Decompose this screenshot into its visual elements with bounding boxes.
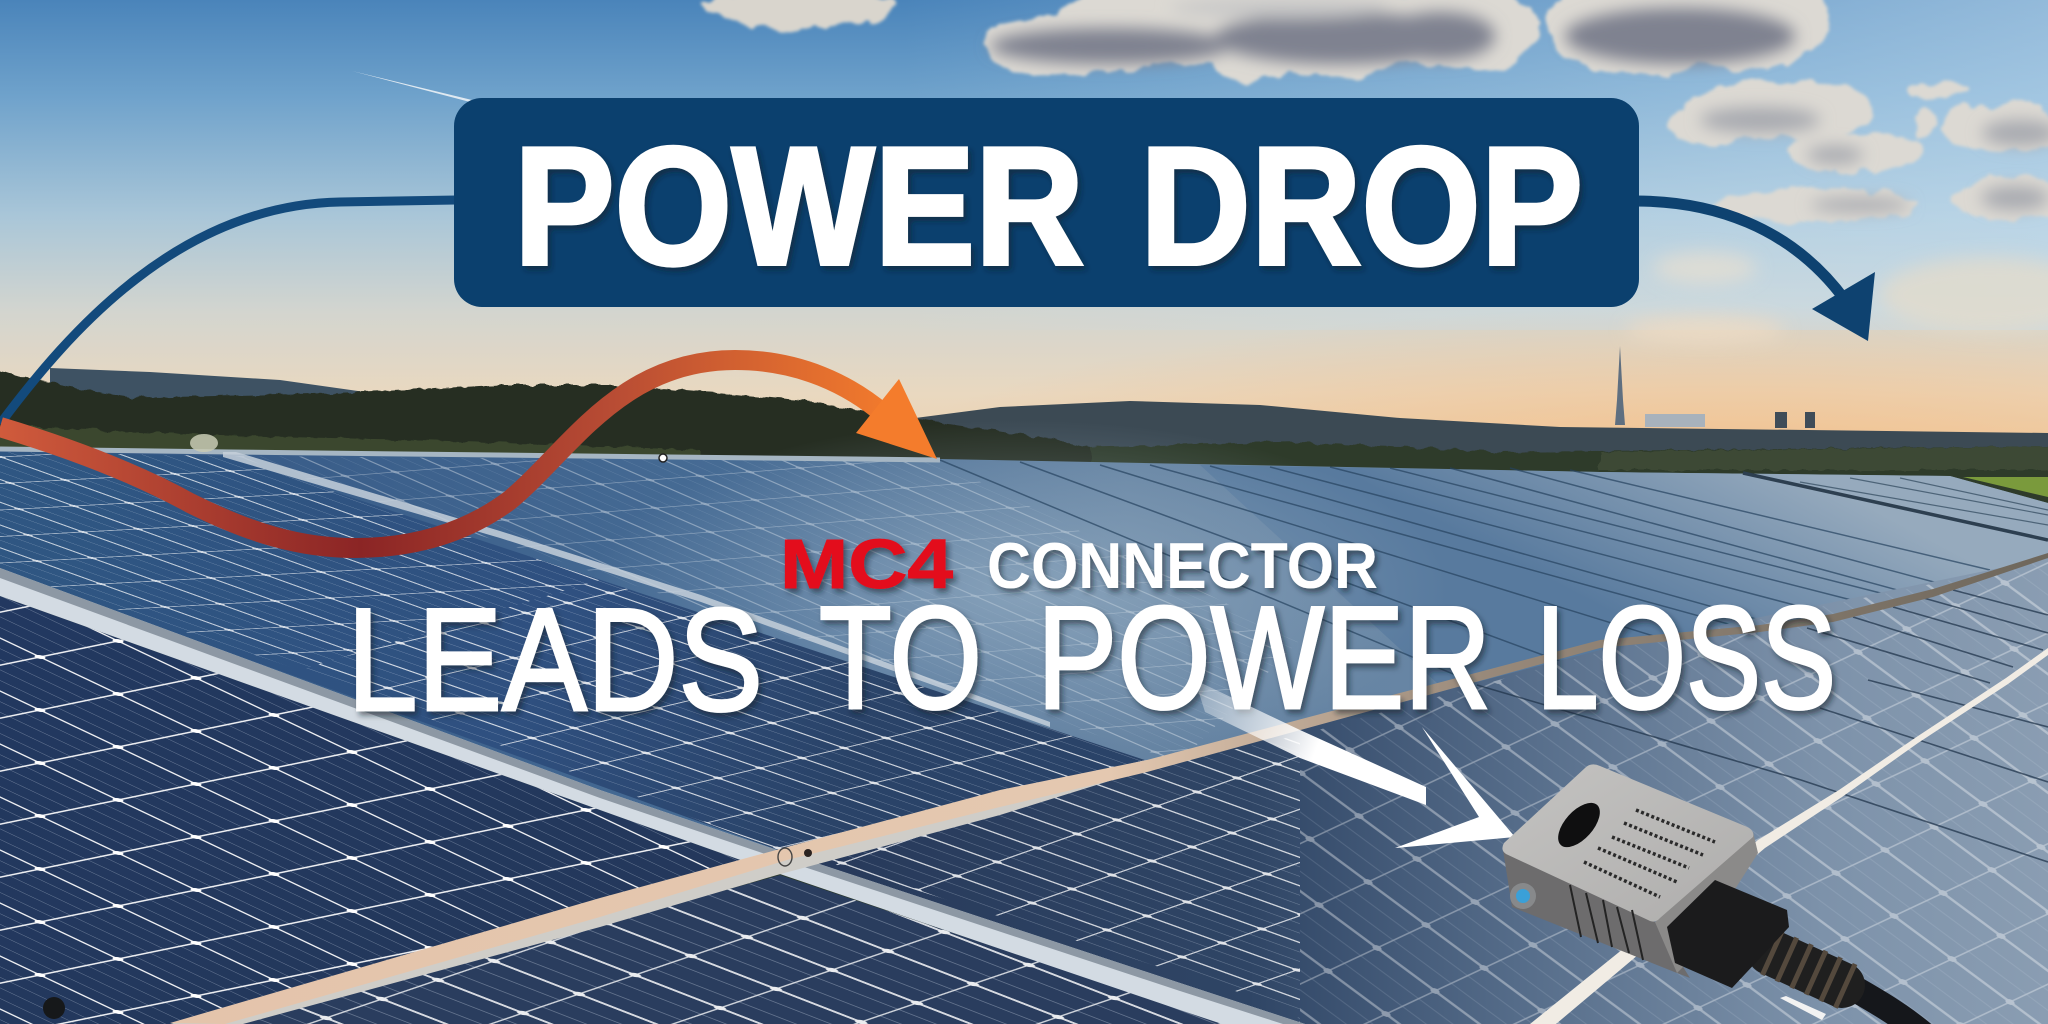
connector body front face: [1503, 850, 1690, 978]
headline: leads to power loss: [347, 576, 1836, 741]
sky background: [0, 0, 2048, 480]
strain relief boot: [1770, 952, 1850, 988]
title: power drop: POWER: [514, 112, 1084, 300]
green field: [1963, 477, 2048, 497]
panel: far upper array: [0, 420, 2048, 858]
headline: leads to power loss: TO: [819, 576, 982, 739]
subtitle: mc4 connector: CONNECTOR: [987, 529, 1378, 602]
mc4 connector device: [1502, 764, 1930, 1024]
subtitle: mc4 connector: MC4: [780, 525, 953, 603]
red orange wave arrow: [0, 360, 937, 548]
distant tower and buildings: [1615, 346, 1815, 428]
solar panel mounting rail: white right rail: [1530, 648, 2048, 1024]
panel: right array: [800, 558, 2048, 1024]
panel: bottom centre array: [240, 875, 1225, 1024]
status led: [1510, 883, 1536, 909]
embossed label text lines: [1584, 810, 1715, 897]
title banner: [454, 98, 1639, 307]
cable: [1848, 985, 1930, 1024]
subtitle: mc4 connector: [780, 525, 1378, 603]
headline: leads to power loss: LEADS: [347, 578, 763, 741]
title: power drop: [514, 112, 1583, 300]
headline: leads to power loss: POWER: [1037, 576, 1491, 739]
blue arrow out of title: [1636, 201, 1875, 341]
solar panel mounting rail: upper silver: [223, 452, 1050, 727]
contrail: [352, 71, 472, 102]
white pointer arrow: [1195, 680, 1515, 848]
solar panel mounting rail: long silver: [0, 568, 1305, 1024]
connector body side face: [1655, 832, 1758, 973]
blue arrow into title: [0, 200, 456, 424]
panel: left array top rows: [0, 452, 1175, 852]
headline: leads to power loss: LOSS: [1536, 576, 1836, 739]
hills and treeline: [0, 368, 2048, 570]
connector body top face: [1502, 764, 1753, 922]
rail clamp, debris and bolts: [43, 434, 1826, 1020]
clouds: [705, 0, 2048, 344]
body grooves: [1570, 885, 1643, 960]
panel: lower left array: [0, 596, 777, 1024]
title: power drop: DROP: [1140, 112, 1583, 300]
black plug: [1667, 880, 1789, 988]
latch window: [1551, 796, 1607, 854]
solar panel mounting rail: tan cross rail: [170, 553, 2048, 1024]
